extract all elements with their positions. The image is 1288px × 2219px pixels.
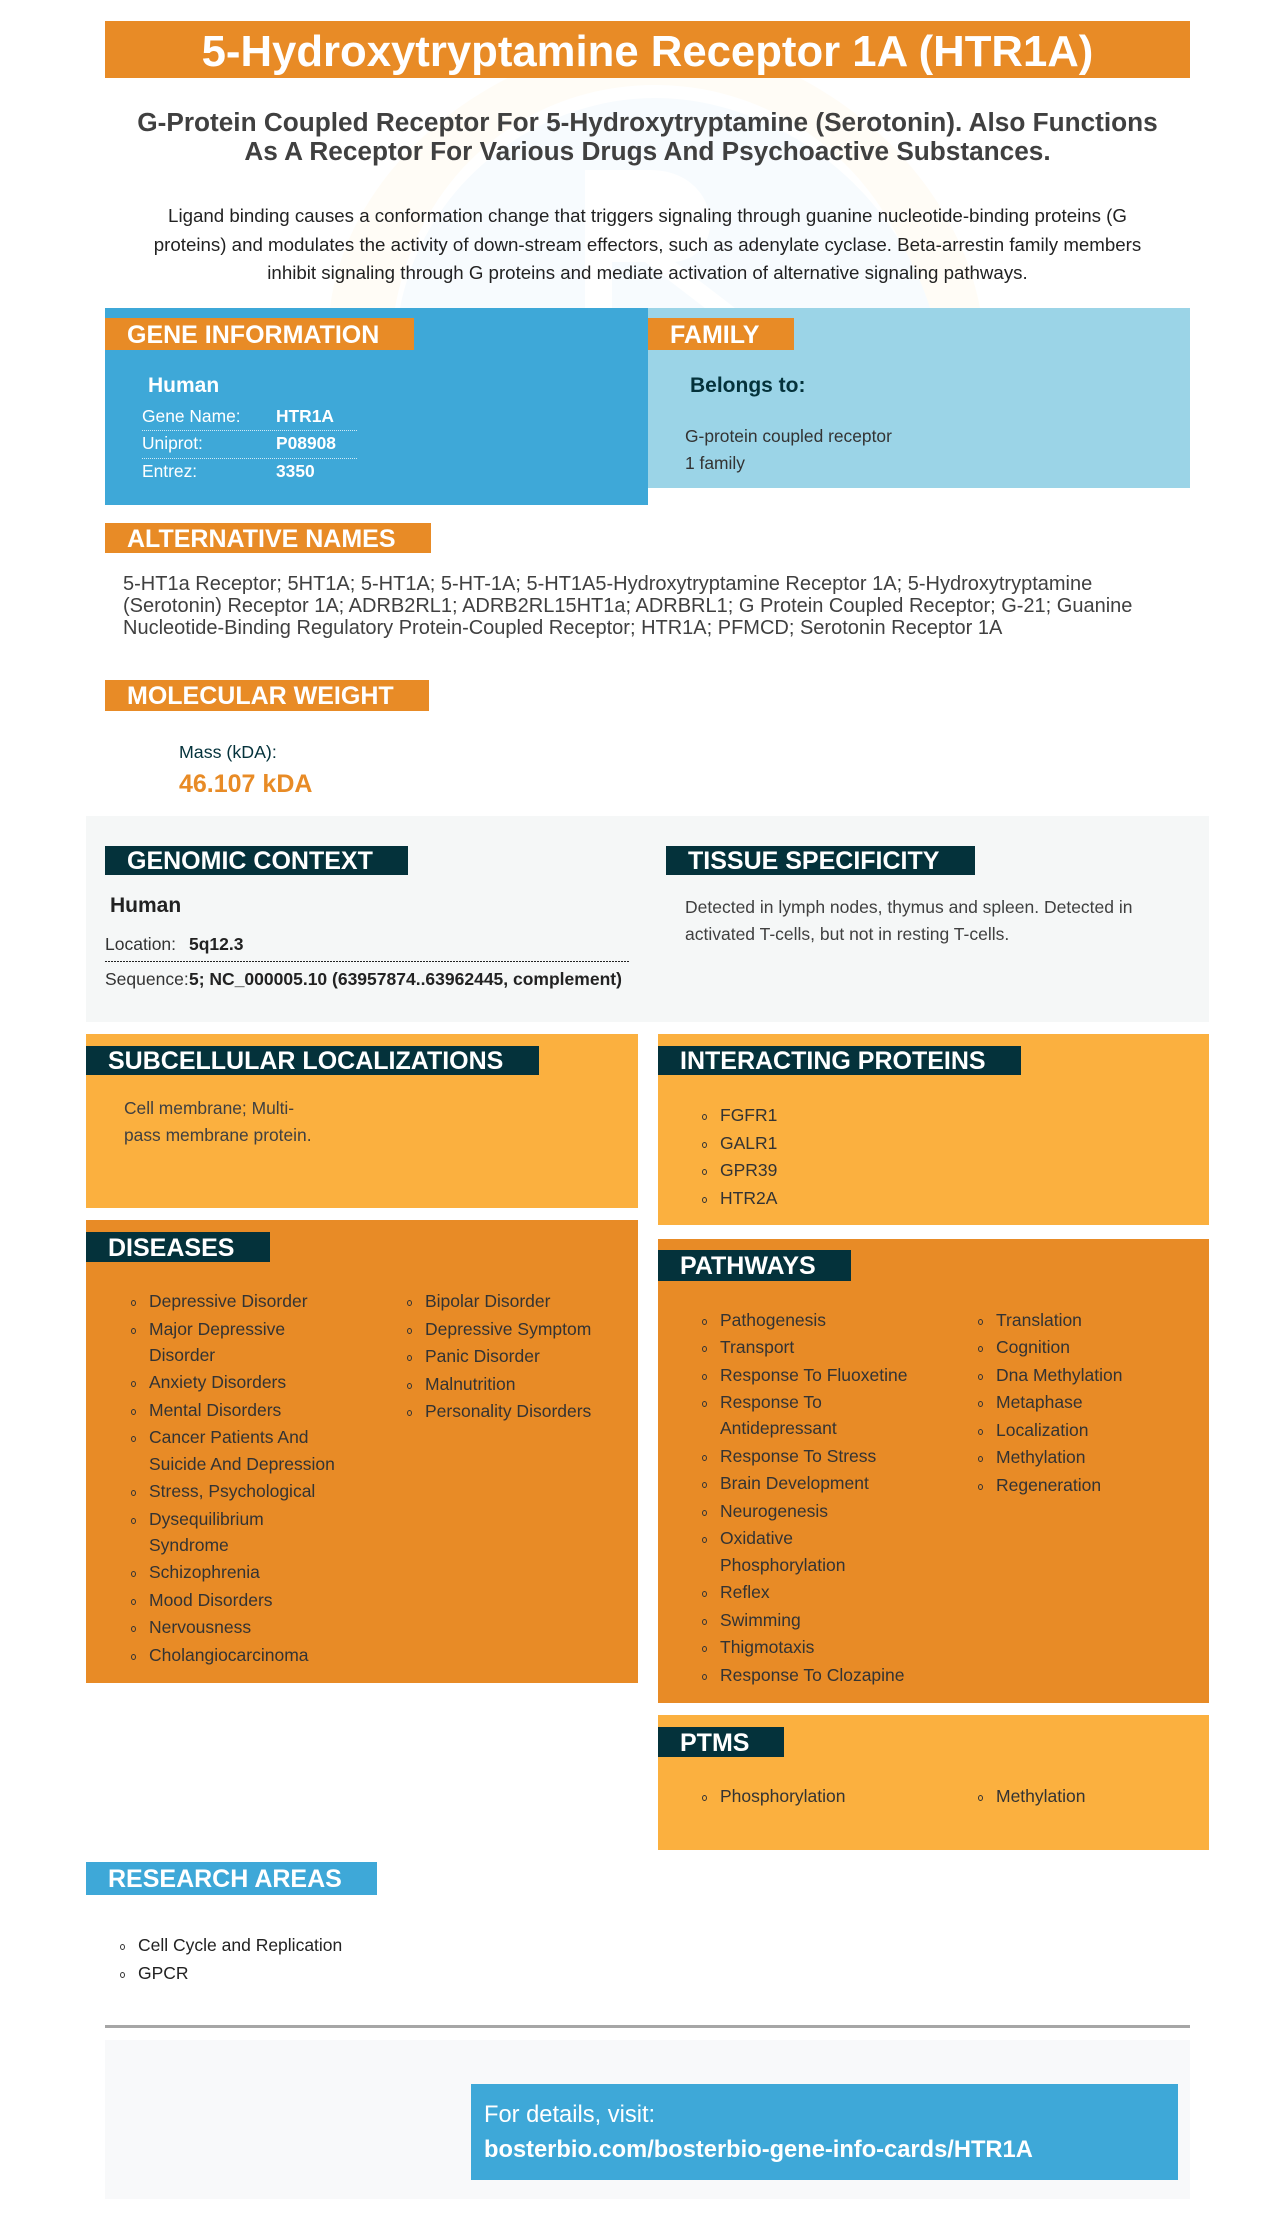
research areas list: GPCR xyxy=(138,1963,189,1983)
research areas list xyxy=(120,1935,342,1983)
disease list column 2: Malnutrition xyxy=(425,1374,515,1394)
heading: ptms: PTMS xyxy=(680,1729,749,1757)
callout: details link: bosterbio.com/bosterbio-gene-info-cards/HTR1A xyxy=(484,2137,1033,2163)
disease list column 1: Nervousness xyxy=(149,1617,251,1637)
subtitle xyxy=(137,107,1158,166)
location row: Location: xyxy=(105,934,176,954)
protein list: FGFR1 xyxy=(720,1105,777,1125)
pathway list column 2: Dna Methylation xyxy=(996,1365,1122,1385)
disease list column 1: Cancer Patients And xyxy=(149,1427,309,1447)
panel: genomic context and tissue specificity: 5q12.3 xyxy=(189,934,243,954)
panel: subcellular localizations xyxy=(86,1034,638,1208)
gene data rows: Gene Name: xyxy=(142,406,241,426)
description: Ligand binding causes a conformation change that triggers signaling through guanine nucleotide-binding proteins (G xyxy=(168,205,1127,226)
ptm list: Phosphorylation xyxy=(720,1786,846,1806)
disease list column 2: Depressive Symptom xyxy=(425,1319,591,1339)
disease list column 2: Personality Disorders xyxy=(425,1401,591,1421)
panel: ptms xyxy=(658,1715,1209,1850)
ptm list xyxy=(702,1786,1086,1806)
heading: alternative names: ALTERNATIVE NAMES xyxy=(127,525,396,553)
pathway list column 1 xyxy=(702,1310,907,1685)
disease list column 1: Schizophrenia xyxy=(149,1562,260,1582)
mass label: Mass (kDA): xyxy=(179,742,277,762)
disease list column 2: Panic Disorder xyxy=(425,1346,540,1366)
callout: details link xyxy=(471,2084,1178,2180)
alternative names text xyxy=(123,573,1132,639)
pathway list column 2: Metaphase xyxy=(996,1392,1083,1412)
protein list: HTR2A xyxy=(720,1188,777,1208)
title: 5-Hydroxytryptamine Receptor 1A (HTR1A) xyxy=(202,27,1093,76)
heading: subcellular localizations: SUBCELLULAR LOCALIZATIONS xyxy=(108,1047,503,1075)
species label: Human xyxy=(110,894,181,917)
subtitle: As A Receptor For Various Drugs And Psychoactive Substances. xyxy=(244,136,1051,166)
disease list column 1: Anxiety Disorders xyxy=(149,1372,286,1392)
background watermark logo xyxy=(330,78,980,308)
heading: family: FAMILY xyxy=(670,321,759,349)
panel: footer xyxy=(105,2040,1190,2199)
description: inhibit signaling through G proteins and mediate activation of alternative signaling pathways. xyxy=(267,262,1028,283)
pathway list column 1: Oxidative xyxy=(720,1528,793,1548)
pathway list column 1: Reflex xyxy=(720,1582,770,1602)
heading: gene information: GENE INFORMATION xyxy=(127,321,379,349)
heading: research areas: RESEARCH AREAS xyxy=(108,1865,342,1893)
protein list: GPR39 xyxy=(720,1160,777,1180)
family text: G-protein coupled receptor xyxy=(685,426,892,446)
disease list column 1: Dysequilibrium xyxy=(149,1509,264,1529)
panel: diseases xyxy=(86,1220,638,1683)
disease list column 1: Stress, Psychological xyxy=(149,1481,315,1501)
protein list xyxy=(702,1105,778,1208)
ptm list: Methylation xyxy=(996,1786,1086,1806)
species label: Human xyxy=(148,374,219,397)
panel: interacting proteins xyxy=(658,1034,1209,1225)
panel: pathways xyxy=(658,1239,1209,1703)
pathway list column 1: Response To xyxy=(720,1392,822,1412)
pathway list column 2: Translation xyxy=(996,1310,1082,1330)
pathway list column 1: Brain Development xyxy=(720,1473,869,1493)
description xyxy=(154,205,1141,283)
disease list column 1: Major Depressive xyxy=(149,1319,285,1339)
gene data rows: HTR1A xyxy=(276,406,334,426)
family text: 1 family xyxy=(685,453,745,473)
panel: family xyxy=(648,308,1190,488)
heading: tissue specificity: TISSUE SPECIFICITY xyxy=(688,847,939,875)
disease list column 1: Mental Disorders xyxy=(149,1400,281,1420)
heading: research areas xyxy=(86,1862,377,1895)
disease list column 1: Mood Disorders xyxy=(149,1590,273,1610)
disease list column 1: Suicide And Depression xyxy=(149,1454,335,1474)
mass value: 46.107 kDA xyxy=(179,770,312,798)
pathway list column 1: Response To Fluoxetine xyxy=(720,1365,907,1385)
pathway list column 1: Thigmotaxis xyxy=(720,1637,814,1657)
heading: diseases xyxy=(86,1232,270,1262)
research areas list: Cell Cycle and Replication xyxy=(138,1935,342,1955)
alternative names text: Nucleotide-Binding Regulatory Protein-Coupled Receptor; HTR1A; PFMCD; Serotonin Receptor 1A xyxy=(123,617,1002,639)
pathway list column 2: Localization xyxy=(996,1420,1088,1440)
localization text: pass membrane protein. xyxy=(124,1124,312,1144)
alternative names text: (Serotonin) Receptor 1A; ADRB2RL1; ADRB2RL15HT1a; ADRBRL1; G Protein Coupled Receptor; G-21; Guanine xyxy=(123,595,1132,617)
tissue text: Detected in lymph nodes, thymus and spleen. Detected in xyxy=(685,897,1132,917)
heading: interacting proteins: INTERACTING PROTEINS xyxy=(680,1047,986,1075)
footer divider xyxy=(105,2025,1190,2028)
disease list column 1: Syndrome xyxy=(149,1535,229,1555)
heading: pathways xyxy=(658,1250,851,1281)
heading: family xyxy=(648,318,794,350)
disease list column 2: Bipolar Disorder xyxy=(425,1291,550,1311)
tissue text: activated T-cells, but not in resting T-cells. xyxy=(685,924,1009,944)
localization text: Cell membrane; Multi- xyxy=(124,1098,294,1118)
panel: genomic context and tissue specificity xyxy=(86,816,1209,1022)
disease list column 2 xyxy=(407,1291,591,1421)
heading: diseases: DISEASES xyxy=(108,1234,234,1262)
callout: details link: For details, visit: xyxy=(484,2102,655,2128)
gene data rows xyxy=(142,406,357,481)
pathway list column 2 xyxy=(978,1310,1122,1495)
belongs to label: Belongs to: xyxy=(690,374,806,397)
gene data rows: Entrez: xyxy=(142,461,197,481)
subtitle: G-Protein Coupled Receptor For 5-Hydroxytryptamine (Serotonin). Also Functions xyxy=(137,107,1158,137)
gene data rows: P08908 xyxy=(276,433,336,453)
pathway list column 1: Response To Stress xyxy=(720,1446,876,1466)
pathway list column 2: Regeneration xyxy=(996,1475,1101,1495)
localization text xyxy=(124,1098,312,1144)
protein list: GALR1 xyxy=(720,1132,777,1152)
pathway list column 1: Neurogenesis xyxy=(720,1501,828,1521)
pathway list column 2: Methylation xyxy=(996,1447,1086,1467)
heading: molecular weight: MOLECULAR WEIGHT xyxy=(127,682,394,710)
pathway list column 1: Antidepressant xyxy=(720,1418,837,1438)
disease list column 1: Depressive Disorder xyxy=(149,1291,308,1311)
pathway list column 1: Response To Clozapine xyxy=(720,1665,905,1685)
heading: genomic context: GENOMIC CONTEXT xyxy=(127,847,373,875)
pathway list column 2: Cognition xyxy=(996,1337,1070,1357)
heading: ptms xyxy=(658,1727,784,1757)
tissue text xyxy=(685,897,1132,944)
heading: pathways: PATHWAYS xyxy=(680,1252,816,1280)
panel: genomic context and tissue specificity: 5; NC_000005.10 (63957874..63962445, complement) xyxy=(189,969,622,989)
gene data rows: Uniprot: xyxy=(142,433,203,453)
pathway list column 1: Swimming xyxy=(720,1610,801,1630)
disease list column 1: Cholangiocarcinoma xyxy=(149,1645,309,1665)
disease list column 1 xyxy=(131,1291,335,1665)
pathway list column 1: Transport xyxy=(720,1337,794,1357)
pathway list column 1: Phosphorylation xyxy=(720,1555,846,1575)
description: proteins) and modulates the activity of down-stream effectors, such as adenylate cyclase. Beta-arrestin family members xyxy=(154,234,1141,254)
panel: gene information xyxy=(105,308,648,505)
gene data rows: 3350 xyxy=(276,461,315,481)
disease list column 1: Disorder xyxy=(149,1345,215,1365)
sequence row: Sequence: xyxy=(105,969,189,989)
alternative names text: 5-HT1a Receptor; 5HT1A; 5-HT1A; 5-HT-1A; 5-HT1A5-Hydroxytryptamine Receptor 1A; 5-Hydroxytryptamine xyxy=(123,573,1092,595)
pathway list column 1: Pathogenesis xyxy=(720,1310,826,1330)
family text xyxy=(685,426,892,473)
